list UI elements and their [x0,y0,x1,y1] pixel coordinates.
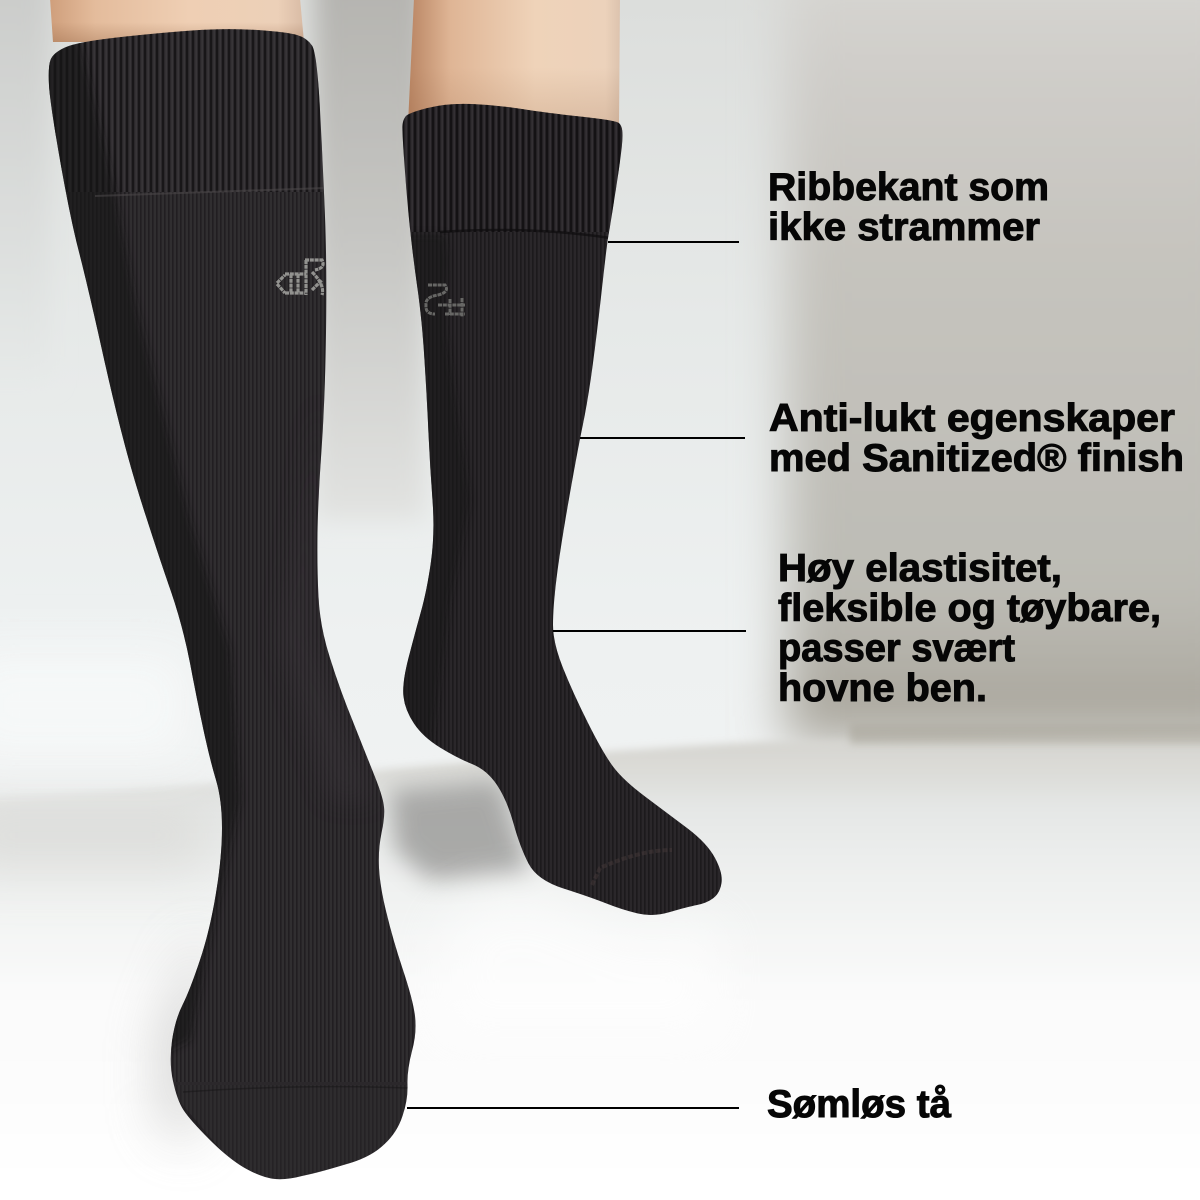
callout: anti-odour [580,397,1184,480]
sock: front left leg [40,20,430,1185]
callout: elasticity: hovne ben. [778,667,987,710]
leg: rear right skin [408,0,620,124]
callout: elasticity [553,547,1161,710]
background wall [0,0,1200,800]
callout: elasticity: Høy elastisitet, [778,547,1062,590]
floor surface [0,650,1200,1200]
shadow under rear foot [390,780,530,880]
callout: seamless toe: Sømløs tå [767,1083,951,1126]
callout: anti-odour: Anti-lukt egenskaper [769,397,1175,440]
callout: anti-odour: med Sanitized® finish [769,437,1184,480]
shadow beside front foot [158,930,210,1150]
callout: ribbed edge: Ribbekant som [768,166,1049,209]
icon: cyclist logo on right sock [426,285,465,317]
callout: elasticity: fleksible og tøybare, [778,587,1161,630]
callout: elasticity: passer svært [778,627,1015,670]
sock: rear right leg [402,104,722,915]
callout: ribbed edge: ikke strammer [768,206,1040,249]
leg: front left skin [50,0,304,42]
floor highlight under rear foot [440,890,720,1040]
icon: cyclist logo on left sock [277,260,323,295]
callout: ribbed edge [608,166,1049,249]
